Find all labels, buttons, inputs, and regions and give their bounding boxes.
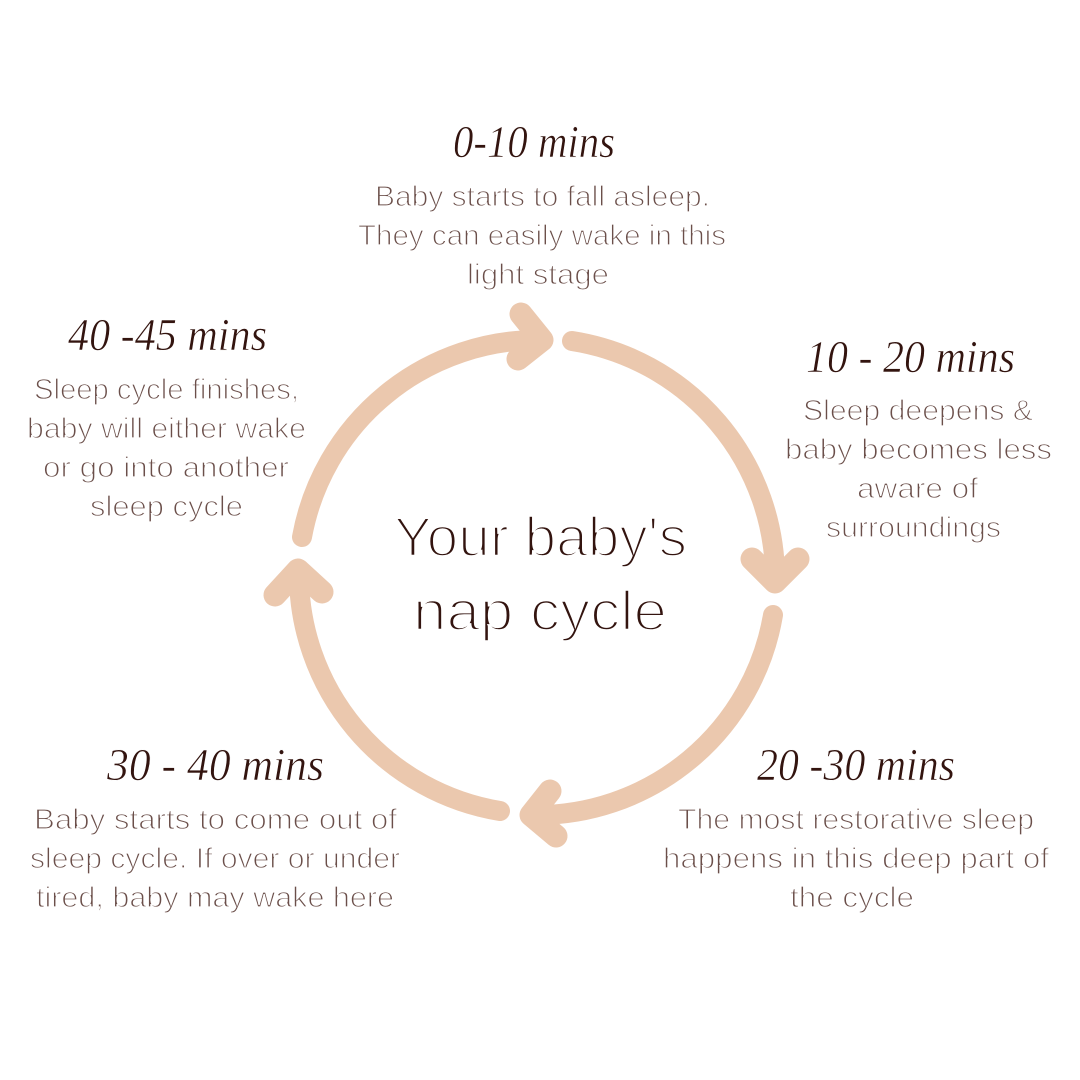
panel: 10-20 mins (785, 331, 1052, 544)
text block: 10-20 mins description: baby becomes less (785, 434, 1052, 466)
text block: 40-45 mins description: Sleep cycle finishes, (34, 374, 299, 406)
arrow: bottom-left arc to 40-45 mins (275, 570, 500, 811)
title (394, 505, 687, 642)
text block: 30-40 mins description: Baby starts to come out of (34, 804, 398, 836)
text block: 40-45 mins description: baby will either wake (27, 413, 306, 445)
text block: 30-40 mins description (30, 804, 400, 914)
text block: 0-10 mins description: Baby starts to fall asleep. (375, 181, 710, 213)
text block: 10-20 mins description: Sleep deepens & (803, 395, 1033, 427)
text block: 0-10 mins description: light stage (467, 259, 609, 291)
heading: 30 - 40 mins: 30 - 40 mins (106, 739, 324, 790)
arrow: top-right arc to 10-20 mins (572, 341, 798, 582)
title: Your baby's (394, 505, 687, 568)
panel: 40-45 mins (27, 309, 306, 523)
heading: 40 -45 mins: 40 -45 mins (68, 309, 267, 360)
arrow: top-left arc to 0-10 mins (302, 314, 542, 537)
text block: 20-30 mins description: the cycle (790, 882, 914, 914)
text block: 0-10 mins description: They can easily wake in this (358, 220, 726, 252)
cycle diagram: four circular arrows (275, 314, 798, 836)
text block: 40-45 mins description: or go into another (43, 452, 289, 484)
text block: 20-30 mins description: The most restorative sleep (678, 804, 1034, 836)
title: nap cycle (413, 579, 667, 642)
text block: 20-30 mins description (663, 804, 1050, 914)
text block: 10-20 mins description: aware of (857, 473, 979, 505)
heading: 10 - 20 mins: 10 - 20 mins (806, 331, 1015, 382)
text block: 40-45 mins description (27, 374, 306, 523)
text block: 20-30 mins description: happens in this deep part of (663, 843, 1050, 875)
text block: 10-20 mins description (785, 395, 1052, 544)
heading: 20 -30 mins: 20 -30 mins (757, 739, 955, 790)
text block: 0-10 mins description (358, 181, 726, 291)
panel: 0-10 mins (358, 116, 726, 291)
arrow: bottom-right arc to 30-40 mins (531, 615, 773, 836)
text block: 30-40 mins description: sleep cycle. If over or under (30, 843, 400, 875)
text block: 10-20 mins description: surroundings (826, 512, 1001, 544)
panel: 30-40 mins (30, 739, 400, 914)
panel: 20-30 mins (663, 739, 1050, 914)
text block: 30-40 mins description: tired, baby may wake here (36, 882, 394, 914)
heading: 0-10 mins: 0-10 mins (453, 116, 615, 167)
text block: 40-45 mins description: sleep cycle (90, 491, 243, 523)
